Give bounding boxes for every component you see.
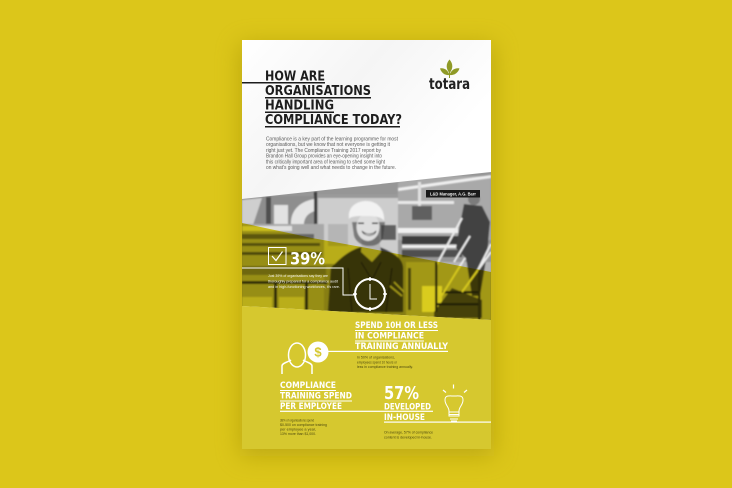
icon: person with dollar: $ — [314, 344, 322, 360]
photo caption label — [426, 190, 480, 198]
logo: totara — [429, 60, 470, 93]
icon: leaves — [440, 60, 460, 78]
panel: factory photo — [242, 170, 491, 322]
description — [384, 430, 433, 440]
icon: light bulb — [443, 384, 467, 421]
icon: clock — [353, 277, 387, 311]
39% description: thoroughly prepared for a compliance audit — [268, 280, 338, 284]
photo yellow tint — [242, 223, 491, 322]
person background — [456, 204, 490, 296]
description — [357, 356, 413, 369]
description: $0-500 on compliance training — [280, 423, 327, 427]
intro text block: on what's going well and what needs to change in the future. — [266, 165, 396, 171]
39% description: and in high-functioning workforces, it's rare. — [268, 285, 340, 289]
57% figure: 57% — [384, 383, 419, 404]
description: 13% more than $1,000. — [280, 432, 316, 436]
stat: 57% developed in-house — [384, 383, 491, 440]
lower factory tones — [242, 224, 324, 312]
title — [242, 68, 402, 128]
39% description: Just 39% of organisations say they are — [268, 274, 328, 278]
panel: yellow lower section — [242, 306, 491, 449]
heading: DEVELOPED — [384, 402, 431, 412]
intro text block: Brandon Hall Group provides an eye-opening insight into — [266, 154, 382, 160]
heading: COMPLIANCE — [280, 381, 336, 391]
connector arrow line — [242, 268, 355, 295]
description: On average, 57% of compliance — [384, 430, 433, 434]
heading: IN COMPLIANCE — [355, 332, 424, 342]
stat: 39% prepared — [242, 248, 387, 311]
logo wordmark: totara — [429, 75, 470, 93]
title: COMPLIANCE TODAY? — [265, 112, 402, 128]
stat: compliance training spend — [280, 381, 433, 436]
heading — [384, 402, 491, 423]
39% description — [268, 274, 340, 289]
description: content is developed in-house. — [384, 436, 432, 440]
heading — [320, 321, 448, 352]
title: HANDLING — [265, 98, 334, 114]
heading: TRAINING ANNUALLY — [355, 342, 448, 352]
intro text block — [266, 136, 398, 171]
woman — [328, 247, 403, 312]
intro text block: Compliance is a key part of the learning programme for most — [266, 136, 398, 142]
description: employees spend 10 hours or — [357, 360, 398, 364]
heading: TRAINING SPEND — [280, 392, 352, 402]
stat: spend 10h or less — [282, 321, 448, 374]
heading: IN-HOUSE — [384, 413, 425, 423]
heading: SPEND 10H OR LESS — [355, 321, 438, 331]
stairs — [434, 288, 482, 318]
description: In 50% of organisations, — [357, 356, 395, 360]
intro text block: organisations, but we know that not everyone is getting it — [266, 142, 390, 148]
description: per employee a year, — [280, 428, 316, 432]
icon: checkbox — [268, 248, 286, 264]
intro text block: this critically important area of learning to shed some light — [266, 159, 385, 165]
description: less in compliance training annually. — [357, 365, 413, 369]
heading: PER EMPLOYEE — [280, 402, 342, 412]
poster drop shadow — [240, 44, 494, 456]
intro text block: right just yet. The Compliance Training 2017 report by — [266, 148, 381, 154]
description: 38% of organisations spend — [280, 418, 314, 422]
heading — [280, 381, 433, 412]
39% figure: 39% — [290, 250, 325, 270]
title: ORGANISATIONS — [265, 83, 371, 99]
description — [280, 418, 327, 436]
poster white top panel — [242, 40, 491, 320]
photo caption label: L&D Manager, A.G. Barr — [430, 192, 476, 197]
title: HOW ARE — [265, 68, 325, 84]
icon: person with dollar — [282, 342, 328, 374]
